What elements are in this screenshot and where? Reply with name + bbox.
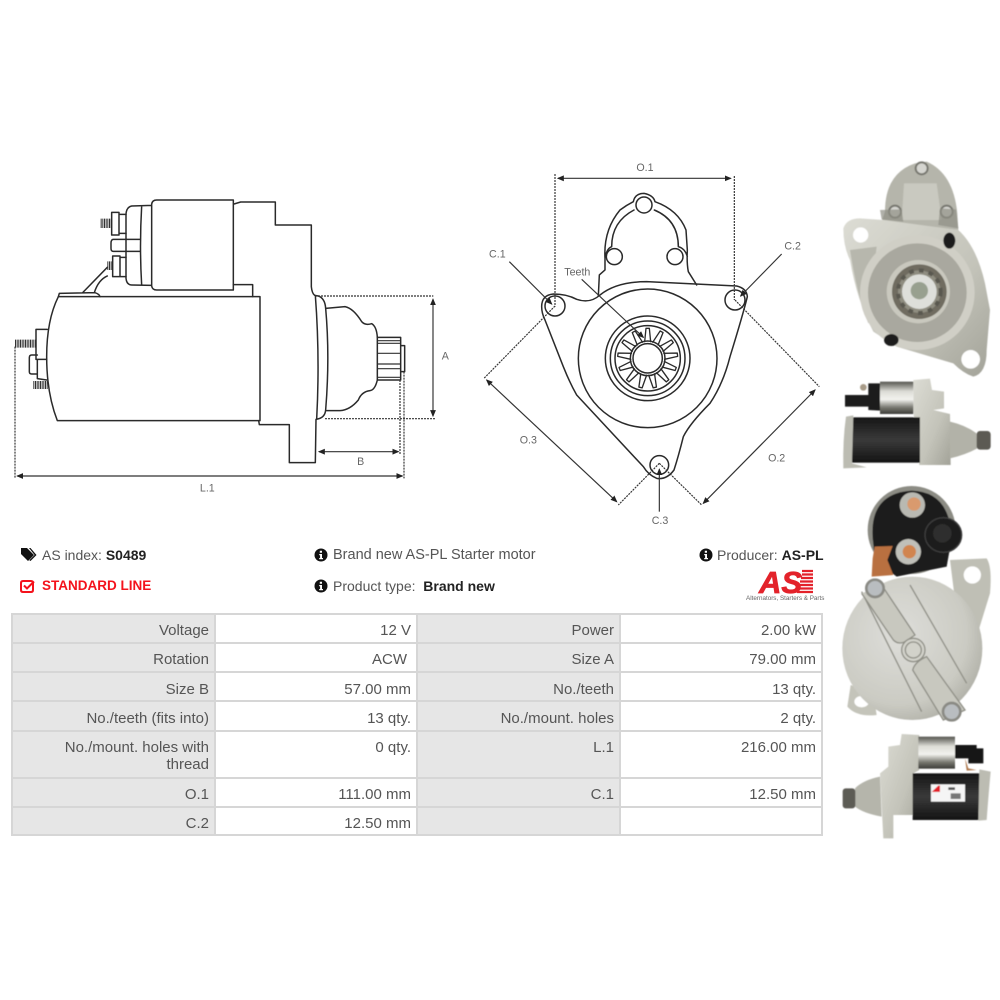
dimension A xyxy=(315,296,450,419)
flange xyxy=(843,218,990,377)
row: No./mount. holes with thread / L.1 xyxy=(13,732,821,777)
end cap xyxy=(978,769,991,821)
upper flange xyxy=(950,558,991,637)
callout C.1 xyxy=(489,249,552,304)
row: Size B / No./teeth xyxy=(13,673,821,700)
dimension O.3 xyxy=(484,306,659,505)
callout C.1: C.1 xyxy=(489,249,506,261)
row: Rotation / Size A xyxy=(13,644,821,671)
motor xyxy=(852,417,920,463)
dimension B xyxy=(319,380,400,468)
callout Teeth xyxy=(564,266,643,337)
drive housing xyxy=(880,734,919,838)
row: O.1 / C.1: C.1 xyxy=(591,786,614,803)
header: standard line: STANDARD LINE xyxy=(42,578,151,593)
row: Size B / No./teeth: No./teeth xyxy=(553,681,614,698)
nose xyxy=(855,777,882,817)
dimension A: A xyxy=(442,351,450,363)
icon: info xyxy=(314,548,328,562)
gear xyxy=(843,788,855,808)
row: O.1 / C.1 xyxy=(13,779,821,806)
row: Rotation / Size A: 79.00 mm xyxy=(749,651,816,668)
mounting lug xyxy=(598,193,697,296)
dimension L.1: L.1 xyxy=(200,482,215,494)
callout Teeth: Teeth xyxy=(564,266,590,278)
header: product type: Product type: Brand new xyxy=(333,578,495,594)
front view technical drawing xyxy=(484,162,819,527)
row: C.2 xyxy=(13,808,821,834)
row: No./mount. holes with thread / L.1: 0 qty. xyxy=(375,739,411,756)
specifications table xyxy=(11,613,823,836)
motor xyxy=(913,773,981,820)
photo: starter rear view xyxy=(842,486,991,720)
dimension O.1 xyxy=(555,162,734,307)
motor body xyxy=(47,297,260,421)
callout C.3: C.3 xyxy=(652,515,668,527)
row: Size B / No./teeth: 13 qty. xyxy=(772,681,816,698)
row: Voltage / Power: Voltage xyxy=(159,622,209,639)
row: Voltage / Power: 12 V xyxy=(380,622,411,639)
dimension B: B xyxy=(357,456,364,468)
row: Size B / No./teeth: Size B xyxy=(166,681,209,698)
drive nose xyxy=(326,307,377,411)
row: No./teeth (fits into) / No./mount. holes: No./mount. holes xyxy=(501,710,614,727)
bolts xyxy=(866,580,960,720)
solenoid terminals xyxy=(101,212,140,277)
solenoid cap xyxy=(868,486,956,574)
row: No./teeth (fits into) / No./mount. holes: No./teeth (fits into) xyxy=(86,710,209,727)
dimension O.3: O.3 xyxy=(520,434,537,446)
solenoid xyxy=(126,200,233,290)
callout C.2 xyxy=(741,240,801,296)
solenoid xyxy=(918,737,955,769)
row: Rotation / Size A: ACW xyxy=(372,651,407,668)
row: Voltage / Power xyxy=(13,615,821,642)
concentric housing rings xyxy=(578,289,717,428)
row: No./mount. holes with thread / L.1: L.1 xyxy=(593,739,614,756)
header: product description: Brand new AS-PL Starter motor xyxy=(333,547,536,563)
lug holes xyxy=(606,197,683,265)
photo: starter side view xyxy=(843,379,991,468)
gear xyxy=(977,431,991,450)
terminal nuts xyxy=(896,492,925,564)
diagonal band xyxy=(862,585,967,720)
lower flange tab xyxy=(847,685,877,715)
screws xyxy=(889,162,953,218)
side view technical drawing xyxy=(15,200,450,494)
logo: AS Alternators, Starters & Parts xyxy=(746,569,824,602)
rear terminals xyxy=(15,329,48,385)
header: producer: Producer: AS-PL xyxy=(717,547,824,563)
photo: starter front view xyxy=(843,162,990,377)
nose xyxy=(950,422,977,458)
dark rubber plugs xyxy=(884,233,955,346)
row: No./teeth (fits into) / No./mount. holes xyxy=(13,702,821,730)
row: No./mount. holes with thread / L.1: 216.00 mm xyxy=(741,739,816,756)
row: C.2: C.2 xyxy=(186,815,209,832)
product label xyxy=(931,784,965,802)
logo tagline: Alternators, Starters & Parts xyxy=(746,595,824,602)
pinion gear xyxy=(377,337,405,380)
icon: check box xyxy=(21,581,34,592)
row: Size B / No./teeth: 57.00 mm xyxy=(344,681,411,698)
connector xyxy=(845,383,880,411)
header: AS index: AS index: S0489 xyxy=(42,547,146,563)
icon: info xyxy=(700,548,712,562)
row: O.1 / C.1: 111.00 mm xyxy=(338,786,411,803)
front disc and pinion xyxy=(860,235,975,350)
icon: info xyxy=(314,580,328,592)
row: Voltage / Power: 2.00 kW xyxy=(761,622,816,639)
dimension O.2 xyxy=(659,300,819,505)
drive housing xyxy=(233,202,328,463)
connector xyxy=(955,745,983,763)
row: No./teeth (fits into) / No./mount. holes: 13 qty. xyxy=(367,710,411,727)
dimension O.1: O.1 xyxy=(636,162,654,174)
flange holes xyxy=(545,290,745,474)
row: Rotation / Size A: Rotation xyxy=(153,651,209,668)
row: O.1 / C.1: 12.50 mm xyxy=(749,786,816,803)
solenoid xyxy=(880,382,913,414)
connector plug xyxy=(925,518,962,552)
row: O.1 / C.1: O.1 xyxy=(185,786,209,803)
copper terminal strap xyxy=(872,546,893,577)
rear cover disc xyxy=(842,577,982,720)
row: C.2: 12.50 mm xyxy=(344,815,411,832)
dimension L.1 xyxy=(15,347,404,494)
photo: starter label side xyxy=(843,734,991,838)
callout C.2: C.2 xyxy=(784,240,801,252)
dimension O.2: O.2 xyxy=(768,453,785,465)
drive housing xyxy=(913,379,951,465)
lug dome xyxy=(882,162,958,230)
flange holes xyxy=(853,227,980,369)
end cap xyxy=(843,415,867,468)
row: Voltage / Power: Power xyxy=(571,622,614,639)
terminal cover on motor xyxy=(58,267,107,297)
callout C.3 xyxy=(652,469,668,527)
pinion teeth xyxy=(618,328,678,388)
flange outline xyxy=(542,282,747,479)
row: No./mount. holes with thread / L.1: No./mount. holes with thread xyxy=(65,739,209,773)
row: No./teeth (fits into) / No./mount. holes: 2 qty. xyxy=(780,710,816,727)
row: Rotation / Size A: Size A xyxy=(571,651,614,668)
icon: tags xyxy=(21,548,36,561)
